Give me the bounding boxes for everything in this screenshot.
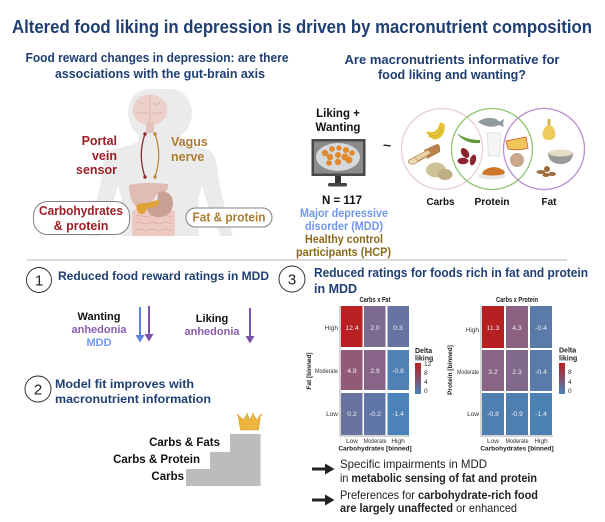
label: vagus nerve <box>171 135 208 164</box>
chart: carbs by protein heatmap: Low <box>467 411 479 418</box>
chart: carbs by fat heatmap <box>306 295 433 452</box>
label: carbs: Carbs <box>426 196 455 208</box>
chart: carbs by protein heatmap: -0.4 <box>535 325 547 332</box>
label: major depressive disorder <box>300 208 388 233</box>
callout: fat and protein: Fat & protein <box>192 210 266 224</box>
icon: milk glass <box>487 133 501 156</box>
symbol: tilde: ~ <box>383 137 391 153</box>
icon: green bean <box>457 133 480 143</box>
chart: carbs by fat heatmap: High <box>325 325 338 332</box>
icon: stomach <box>147 192 173 217</box>
chart: carbs by protein heatmap: 4 <box>568 379 572 386</box>
chart: carbs by fat heatmap: 2.9 <box>370 368 380 375</box>
icon: crown <box>237 413 262 430</box>
badge: number 1: 1 <box>35 272 43 290</box>
label: liking: Liking <box>196 313 228 325</box>
label: healthy control participants <box>296 234 391 259</box>
label: portal vein sensor <box>76 134 117 177</box>
chart: carbs by protein heatmap: High <box>466 327 479 334</box>
label: healthy control participants: Healthy control <box>305 234 383 246</box>
label: healthy control participants: participants (HCP) <box>296 247 391 259</box>
chart: carbs by protein heatmap: Low <box>487 438 499 445</box>
arrow: conclusion 2 <box>312 494 334 506</box>
chart: carbs by fat heatmap: High <box>391 438 405 445</box>
chart: carbs by protein heatmap: 8 <box>568 369 572 376</box>
chart: carbs by fat heatmap: 2.0 <box>370 325 380 332</box>
heading: macronutrient question: food liking and wanting? <box>378 68 526 82</box>
chart: carbs by fat heatmap: -0.2 <box>369 411 381 418</box>
chart: carbs by fat heatmap: -0.8 <box>392 368 404 375</box>
icon: fish <box>478 118 504 127</box>
label: wanting <box>71 311 127 349</box>
heading: finding 1: Reduced food reward ratings in MDD <box>58 269 269 283</box>
label: fat: Fat <box>542 196 557 208</box>
text: conclusion 1: in metabolic sensing of fat and protein <box>340 471 537 485</box>
icon: banana <box>428 124 443 138</box>
chart: carbs by protein heatmap: 4.3 <box>512 325 522 332</box>
chart: carbs by protein heatmap: Delta <box>559 348 576 354</box>
text: conclusion 2: are largely unaffected or enhanced <box>340 501 517 515</box>
chart: carbs by protein heatmap: Moderate <box>457 369 479 376</box>
text: conclusion 1 <box>340 457 537 485</box>
icon: pancreas <box>136 200 159 214</box>
venn diagram of macronutrients <box>402 108 584 190</box>
label: sample size: N = 117 <box>322 195 362 207</box>
chart: carbs by fat heatmap: -1.4 <box>392 411 404 418</box>
icon: intestines <box>132 210 175 236</box>
chart: carbs by protein heatmap: -0.4 <box>535 369 547 376</box>
chart: model staircase <box>186 434 260 486</box>
label: portal vein sensor: sensor <box>76 163 117 177</box>
chart: carbs by fat heatmap: 12.4 <box>345 325 359 332</box>
arrow: conclusion 1 <box>312 464 334 474</box>
arrow: portal vein <box>141 132 147 179</box>
icon: liver <box>129 183 168 208</box>
text: conclusion 2: Preferences for carbohydrate-rich food <box>340 488 538 502</box>
chart: carbs by protein heatmap: -0.9 <box>511 411 523 418</box>
circle: protein <box>452 108 532 190</box>
chart: carbs by fat heatmap: Low <box>346 438 358 445</box>
chart: carbs by protein heatmap <box>447 295 577 452</box>
heading: finding 3 <box>314 266 588 296</box>
label: liking and wanting: Wanting <box>316 122 360 134</box>
panel: finding 1 <box>26 268 269 349</box>
chart: carbs by fat heatmap: Carbohydrates [binned] <box>338 446 412 452</box>
chart: carbs by protein heatmap: 2.3 <box>512 369 522 376</box>
chart: carbs by fat heatmap: 12 <box>424 361 432 368</box>
chart: carbs by fat heatmap: Fat [binned] <box>306 352 313 390</box>
chart: carbs by protein heatmap: High <box>534 438 548 445</box>
chart: carbs by fat heatmap: 4.8 <box>347 368 357 375</box>
chart: carbs by protein heatmap: 11.3 <box>487 325 500 332</box>
chart: carbs by protein heatmap: Protein [binned] <box>447 345 454 395</box>
heading: finding 2: Model fit improves with <box>55 377 194 391</box>
icon: roast chicken <box>478 167 506 180</box>
arrow: wanting down MDD <box>136 307 144 342</box>
badge: number 3 <box>279 266 305 292</box>
chart: carbs by protein heatmap: 3.2 <box>488 369 498 376</box>
label: carbs and fats: Carbs & Fats <box>149 437 220 449</box>
heading: finding 3: in MDD <box>314 282 357 296</box>
chart: carbs by protein heatmap: Carbs x Protein <box>496 295 538 304</box>
icon: egg nut <box>510 153 524 167</box>
label: carbs and protein: Carbs & Protein <box>113 454 200 466</box>
label: liking <box>184 313 240 338</box>
icon: oil bottle <box>543 119 555 140</box>
chart: carbs by protein heatmap: 0 <box>568 388 572 395</box>
chart: carbs by protein heatmap: liking <box>559 356 577 362</box>
arrow: liking down anhedonia <box>246 308 254 344</box>
text: conclusion 2 <box>340 488 538 515</box>
circle: fat <box>504 108 584 190</box>
icon: monitor showing food <box>312 139 366 186</box>
callout: carbohydrates and protein: Carbohydrates <box>39 204 123 218</box>
label: major depressive disorder: Major depressive <box>300 208 388 220</box>
chart: carbs by protein heatmap: -0.8 <box>487 411 499 418</box>
icon: bowl <box>548 150 573 164</box>
chart: carbs by fat heatmap: Moderate <box>315 368 338 375</box>
label: carbs: Carbs <box>151 471 184 483</box>
label: portal vein sensor: Portal <box>82 134 117 148</box>
chart: carbs by fat heatmap: 0 <box>424 388 428 395</box>
icon: cheese <box>506 137 528 150</box>
icon: bread <box>408 144 440 164</box>
heading: macronutrient question: Are macronutrients informative for <box>344 53 560 67</box>
badge: number 2 <box>25 376 51 402</box>
label: major depressive disorder: disorder (MDD) <box>305 221 383 233</box>
label: protein: Protein <box>474 196 510 208</box>
chart: carbs by protein heatmap: -1.4 <box>535 411 547 418</box>
label: vagus nerve: Vagus <box>171 135 208 149</box>
callout: carbohydrates and protein <box>34 202 130 234</box>
label: liking and wanting: Liking + <box>316 108 360 120</box>
label: wanting: anhedonia <box>71 324 127 336</box>
panel: finding 3 <box>279 266 588 452</box>
heading: finding 2: macronutrient information <box>55 392 211 406</box>
arrow: wanting down anhedonia <box>144 306 154 342</box>
badge: number 3: 3 <box>288 272 296 288</box>
icon: potatoes <box>426 162 452 180</box>
badge: number 2: 2 <box>34 382 42 398</box>
chart: carbs by fat heatmap: Low <box>326 411 338 418</box>
icon: brain <box>132 94 168 133</box>
chart: carbs by fat heatmap: Delta <box>415 348 432 355</box>
badge: number 1 <box>26 268 52 292</box>
label: liking and wanting <box>316 108 360 134</box>
label: portal vein sensor: vein <box>92 149 117 163</box>
text: conclusion 1: Specific impairments in MDD <box>340 457 487 471</box>
callout: carbohydrates and protein: & protein <box>54 219 108 233</box>
heading: finding 2 <box>55 377 211 406</box>
arrow: vagus nerve <box>153 132 159 179</box>
icon: nuts <box>536 166 556 177</box>
chart: carbs by fat heatmap: 0.3 <box>393 325 403 332</box>
circle: carbs <box>402 108 482 190</box>
panel: finding 2 <box>25 376 262 486</box>
callout: fat and protein <box>186 208 272 227</box>
chart: carbs by fat heatmap: Carbs x Fat <box>360 295 391 304</box>
icon: body silhouette <box>87 89 233 236</box>
label: wanting: MDD <box>86 337 112 349</box>
chart: carbs by fat heatmap: 0.2 <box>347 411 357 418</box>
chart: carbs by fat heatmap: 8 <box>424 370 428 377</box>
chart: carbs by protein heatmap: Moderate <box>506 438 529 445</box>
chart: carbs by fat heatmap: liking <box>415 356 433 362</box>
heading: finding 3: Reduced ratings for foods rich in fat and protein <box>314 266 588 280</box>
label: vagus nerve: nerve <box>171 150 204 164</box>
heading: gut-brain axis question <box>26 51 289 81</box>
heading: gut-brain axis question: associations with the gut-brain axis <box>55 67 265 81</box>
chart: carbs by fat heatmap: 4 <box>424 379 428 386</box>
icon: kidney beans <box>458 146 477 166</box>
label: liking: anhedonia <box>184 326 240 338</box>
chart: carbs by fat heatmap: Moderate <box>364 438 387 445</box>
body illustration <box>87 89 233 236</box>
heading: gut-brain axis question: Food reward changes in depression: are there <box>26 51 289 65</box>
heading: macronutrient question <box>344 53 560 82</box>
chart: carbs by protein heatmap: Carbohydrates [binned] <box>480 446 554 452</box>
label: wanting: Wanting <box>78 311 120 323</box>
